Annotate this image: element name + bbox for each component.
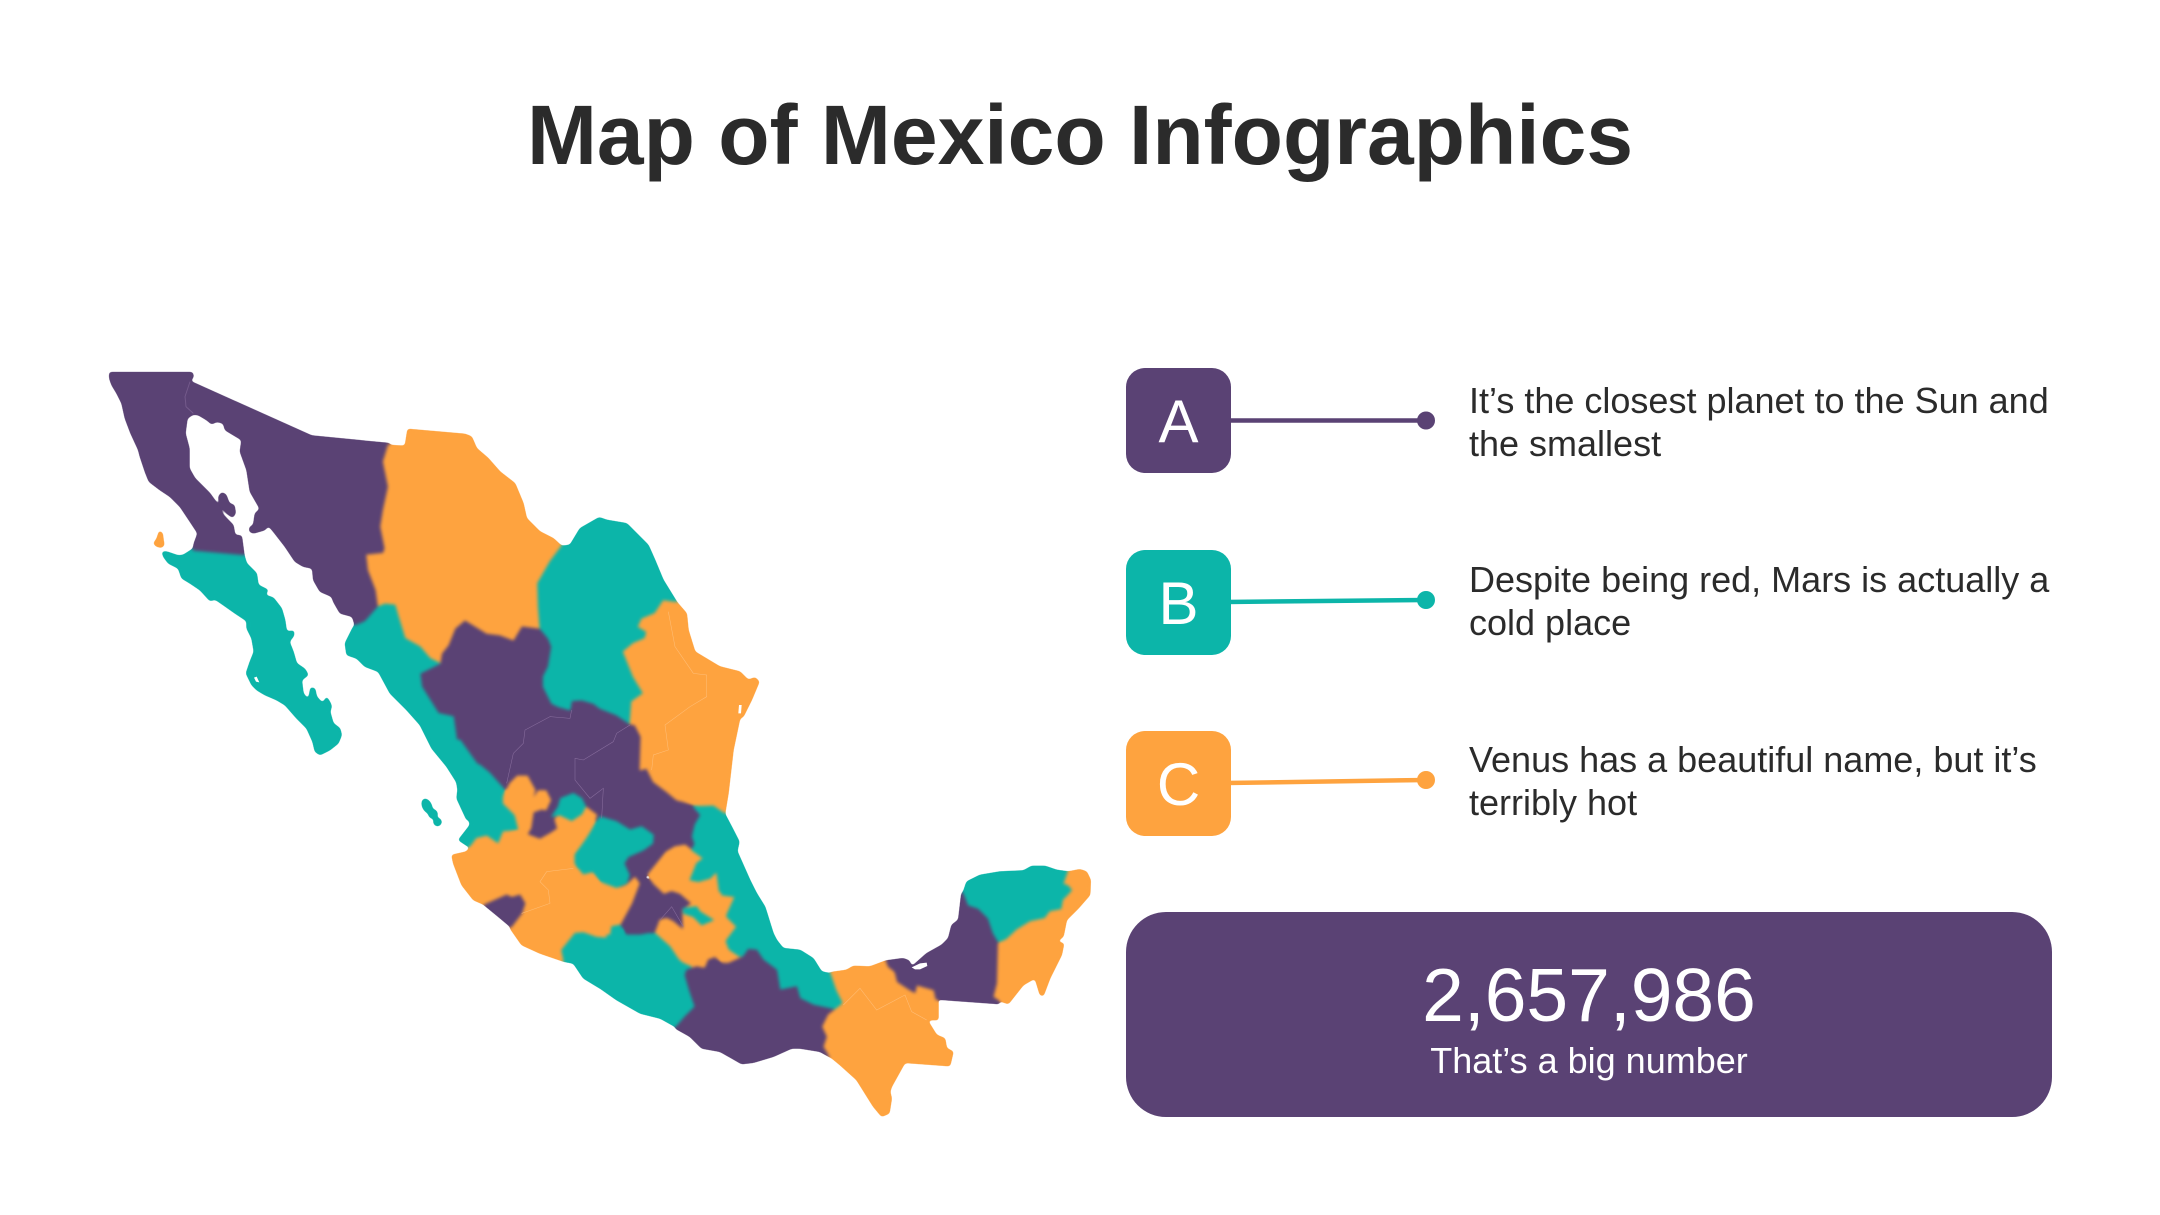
badge A: A [1158, 388, 1199, 455]
big number: 2,657,986 [1422, 953, 1756, 1037]
connector line C [1231, 771, 1435, 789]
region: Quintana Roo [994, 869, 1091, 1004]
legend item B [1126, 550, 2050, 655]
legend item A [1126, 368, 2049, 473]
badge C: C [1157, 751, 1200, 818]
region: Campeche [886, 892, 1000, 1004]
description C: terribly hot [1469, 782, 1637, 823]
region: Nuevo Leon and Tamaulipas [623, 601, 759, 813]
map regions [109, 372, 1091, 1117]
region: Veracruz [690, 806, 843, 1010]
badge C [1126, 731, 1231, 836]
region: Guanajuato and Queretaro [552, 793, 653, 888]
region: Puebla and Hidalgo [648, 845, 743, 968]
stat caption: That’s a big number [1430, 1040, 1748, 1081]
region: Yucatan [963, 866, 1073, 942]
description C [1469, 739, 2037, 823]
region: Durango, Zacatecas and San Luis Potosi [420, 620, 702, 943]
region: Jalisco and Michoacan [452, 776, 639, 962]
badge A [1126, 368, 1231, 473]
connector line B [1231, 591, 1435, 609]
region: Cedros island [153, 531, 164, 548]
region: Colima and Aguascalientes [484, 810, 557, 927]
region: Oaxaca [675, 949, 837, 1064]
description B: cold place [1469, 602, 1631, 643]
description B [1469, 559, 2050, 643]
badge B: B [1158, 570, 1199, 637]
region: Nayarit [450, 740, 518, 847]
region: Baja California and Sonora [109, 372, 390, 626]
connector line A [1231, 412, 1435, 430]
description C: Venus has a beautiful name, but it’s [1469, 739, 2037, 780]
description A: It’s the closest planet to the Sun and [1469, 380, 2049, 421]
region: Marias islands [419, 797, 442, 826]
region: Tlaxcala [683, 907, 713, 925]
region: Chihuahua [367, 429, 562, 663]
region: Coahuila [538, 517, 677, 724]
legend item C [1126, 731, 2037, 836]
title: Map of Mexico Infographics [527, 88, 1633, 182]
region: Chiapas and Tabasco [823, 961, 953, 1117]
description A: the smallest [1469, 423, 1661, 464]
region: Sinaloa [345, 604, 503, 820]
region: Guerrero [562, 925, 695, 1027]
region: Baja California Sur [162, 549, 342, 755]
description B: Despite being red, Mars is actually a [1469, 559, 2049, 600]
badge B [1126, 550, 1231, 655]
description A [1469, 380, 2049, 464]
stat panel [1126, 912, 2052, 1117]
